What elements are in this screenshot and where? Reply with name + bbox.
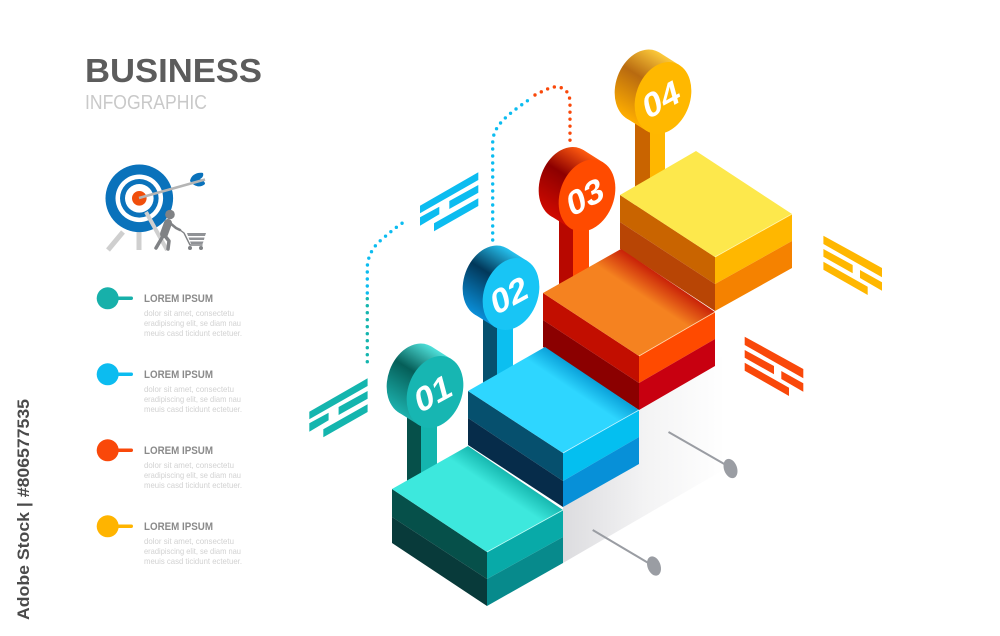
legend item 3: [97, 439, 242, 490]
step 03: [543, 249, 715, 410]
pin 02: [451, 237, 551, 394]
legend item 3: eradipiscing elit, se diam nau: [144, 470, 241, 480]
pin 01: 01: [411, 367, 455, 422]
step 02: [468, 347, 639, 507]
legend item 2: LOREM IPSUM: [144, 369, 213, 381]
legend item 1: dolor sit amet, consectetu: [144, 308, 234, 318]
pin 03: [527, 139, 627, 295]
legend item 1: [97, 287, 242, 338]
title: INFOGRAPHIC: [85, 92, 207, 114]
legend item 3: meuis casd ticidunt ectetuer.: [144, 480, 242, 490]
text bars: teal: [309, 378, 368, 437]
icon: target with dart and person pushing cart: [106, 164, 206, 250]
legend item 2: [97, 363, 242, 414]
title: [85, 52, 262, 114]
pin 02: 02: [487, 269, 531, 324]
legend item 3: LOREM IPSUM: [144, 445, 213, 457]
legend item 2: meuis casd ticidunt ectetuer.: [144, 404, 242, 414]
dotted connector: 02 to 03: [493, 87, 570, 240]
pin 04: [603, 41, 703, 198]
legend item 1: LOREM IPSUM: [144, 293, 213, 305]
legend item 2: eradipiscing elit, se diam nau: [144, 394, 241, 404]
text bars: blue: [420, 172, 478, 231]
legend item 3: dolor sit amet, consectetu: [144, 460, 234, 470]
pin 03: 03: [563, 170, 607, 225]
pointer pin near step 02: [668, 432, 740, 480]
legend item 4: eradipiscing elit, se diam nau: [144, 546, 241, 556]
title: BUSINESS: [85, 52, 262, 89]
text bars: red: [745, 337, 803, 396]
side credit label: Adobe Stock | #806577535: [14, 399, 33, 620]
pin 01: [375, 335, 475, 490]
legend item 4: dolor sit amet, consectetu: [144, 536, 234, 546]
pointer pin near step 01: [593, 530, 664, 578]
text bars: yellow: [823, 236, 882, 295]
legend item 4: [97, 515, 242, 566]
legend item 1: meuis casd ticidunt ectetuer.: [144, 328, 242, 338]
legend item 1: eradipiscing elit, se diam nau: [144, 318, 241, 328]
step 01: [392, 446, 563, 606]
pin 04: 04: [639, 72, 684, 128]
dotted connector: 01 to 02: [367, 222, 404, 362]
legend item 2: dolor sit amet, consectetu: [144, 384, 234, 394]
step 04: [620, 151, 792, 311]
legend item 4: LOREM IPSUM: [144, 521, 213, 533]
legend item 4: meuis casd ticidunt ectetuer.: [144, 556, 242, 566]
staircase floor shadow: [563, 355, 725, 563]
